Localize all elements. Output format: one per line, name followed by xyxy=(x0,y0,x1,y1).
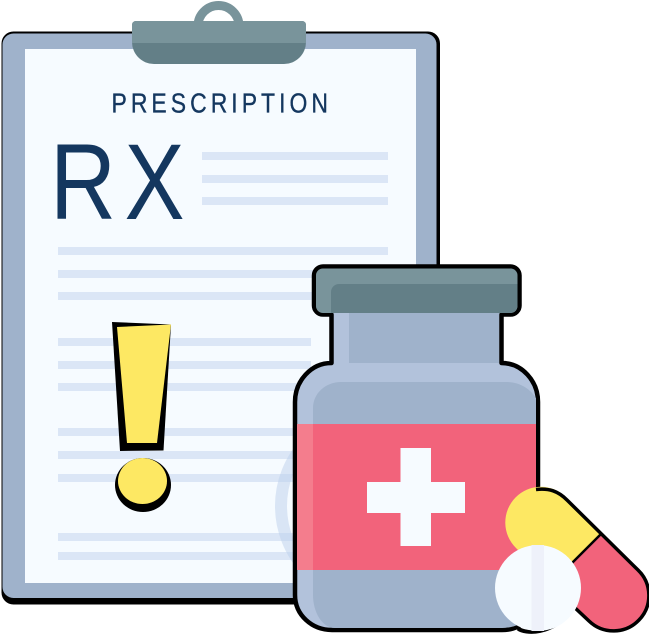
icon: round pill xyxy=(495,545,581,632)
icon: white cross xyxy=(367,448,465,546)
paper sheet xyxy=(25,49,416,583)
icon: exclamation mark xyxy=(112,322,171,512)
capsule outline xyxy=(536,489,649,631)
text lines: body of prescription xyxy=(58,247,388,560)
heading: RX xyxy=(50,121,184,242)
heading: RX: X xyxy=(124,121,184,242)
bottle label xyxy=(297,424,536,570)
panel: clipboard xyxy=(2,32,440,604)
heading: RX: R xyxy=(50,121,116,242)
capsule red half xyxy=(550,533,649,630)
text lines beside RX xyxy=(202,152,388,205)
icon: capsule xyxy=(505,487,649,631)
bottle outline silhouette xyxy=(295,266,538,630)
faint ring behind bottle xyxy=(281,413,467,599)
bottle body xyxy=(297,382,536,628)
bottle neck xyxy=(349,313,499,363)
bottle cap xyxy=(316,268,518,313)
clipboard clip xyxy=(132,6,306,64)
icon: medicine bottle xyxy=(295,266,538,630)
capsule yellow half xyxy=(505,487,602,584)
heading: prescription: PRESCRIPTION xyxy=(112,88,328,119)
